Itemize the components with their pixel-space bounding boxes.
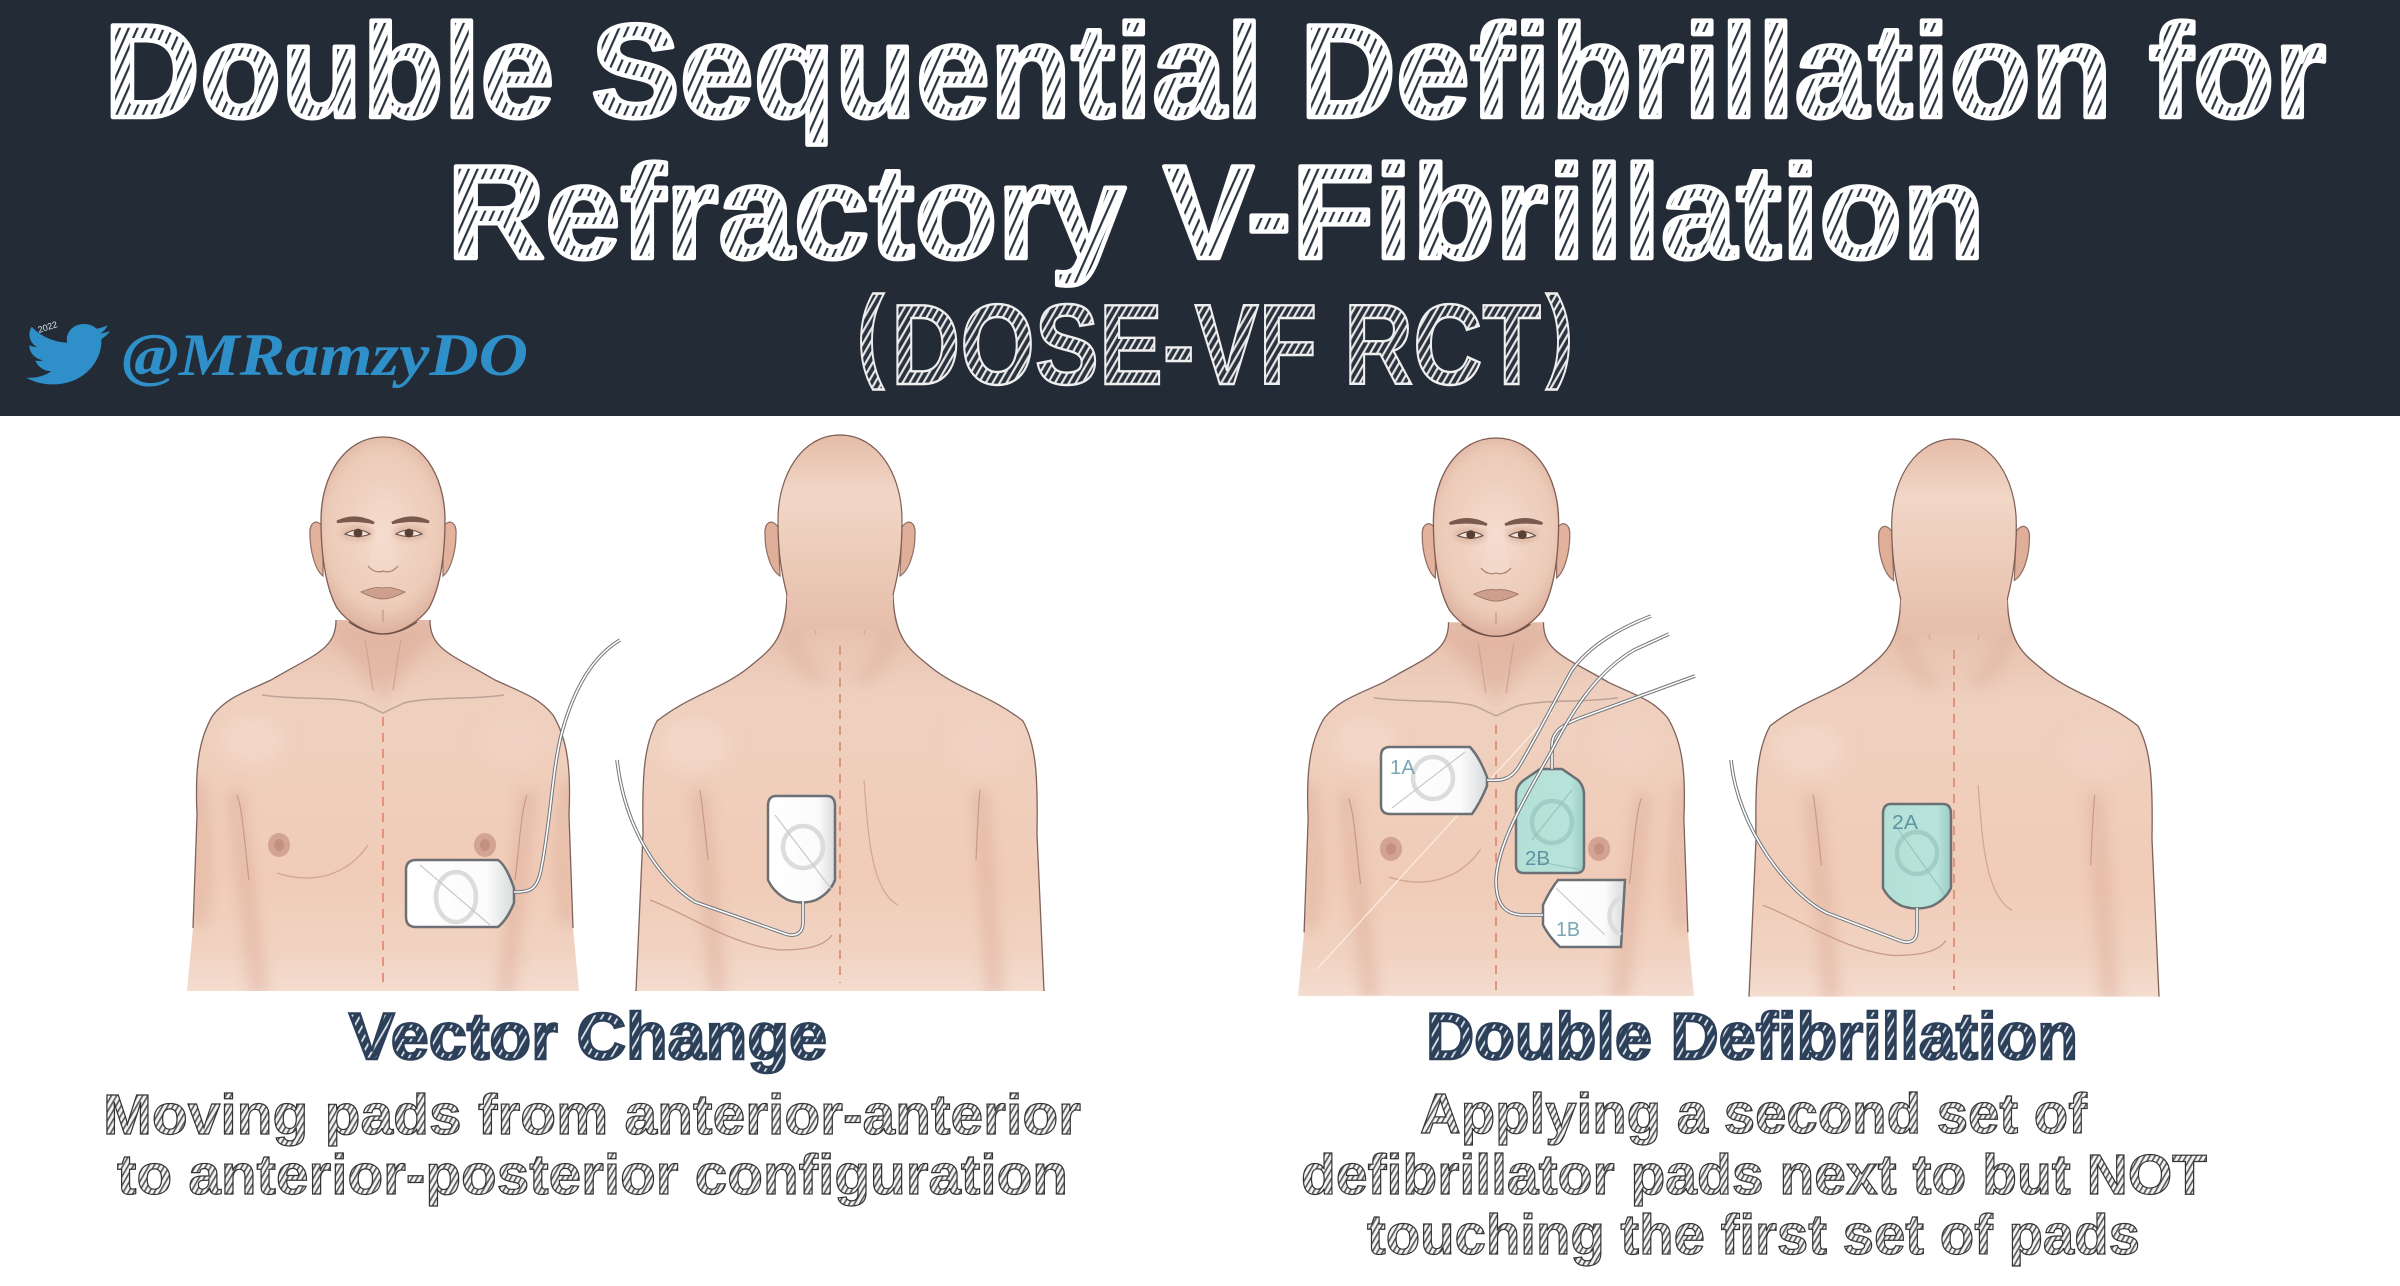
pad: 2B: [1516, 769, 1584, 873]
description: double defibrillation: touching the first set of pads: [1367, 1203, 2140, 1267]
title: Double Sequential Defibrillation for: [104, 0, 2326, 146]
title: [104, 0, 2326, 287]
panel: double defibrillation illustrations: [1298, 438, 2159, 1001]
pad: 1A: 1A: [1390, 757, 1416, 779]
pad: 2B: 2B: [1525, 848, 1550, 870]
wires: [1487, 616, 1695, 915]
pad: 1B: [1543, 880, 1625, 947]
pad: 1B: 1B: [1556, 919, 1580, 941]
title: Refractory V-Fibrillation: [447, 139, 1985, 287]
subtitle: trial name: DOSE-VF RCT: [891, 282, 1541, 409]
social handle: [26, 319, 528, 388]
panel: vector change illustrations: [187, 435, 1044, 995]
heading: double defibrillation: Double Defibrillation: [1426, 999, 2078, 1073]
header band: [0, 0, 2400, 416]
pad: anterior: [406, 860, 514, 927]
heading: vector change: Vector Change: [349, 999, 827, 1073]
pad: 2A: 2A: [1892, 812, 1919, 834]
figure: back torso with pad 2A: [1731, 439, 2159, 1001]
description: vector change: to anterior-posterior configuration: [117, 1143, 1068, 1207]
wire: 2A: [1731, 760, 1917, 942]
description: double defibrillation: Applying a second set of: [1420, 1082, 2088, 1146]
figure: front torso with two pads: [1298, 438, 1695, 1000]
figure: back torso with posterior pad: [617, 435, 1044, 995]
icon: twitter bird: 2022: [37, 319, 59, 335]
description: vector change: [103, 1083, 1081, 1207]
pad: 2A: [1883, 804, 1951, 908]
wire: anterior pad: [514, 640, 620, 892]
icon: twitter bird: [26, 319, 110, 384]
subtitle: trial name: ): [1546, 275, 1573, 390]
pad: posterior: [768, 796, 835, 902]
description: double defibrillation: [1301, 1082, 2207, 1267]
figure: front torso with anterior pad: [187, 437, 620, 995]
pad: 1A: [1381, 747, 1487, 814]
subtitle: trial name: (: [857, 275, 885, 390]
description: double defibrillation: defibrillator pads next to but NOT: [1301, 1143, 2207, 1207]
wire: posterior pad: [617, 760, 803, 935]
description: vector change: Moving pads from anterior-anterior: [103, 1083, 1081, 1147]
handle text: @MRamzyDO: [122, 322, 528, 388]
